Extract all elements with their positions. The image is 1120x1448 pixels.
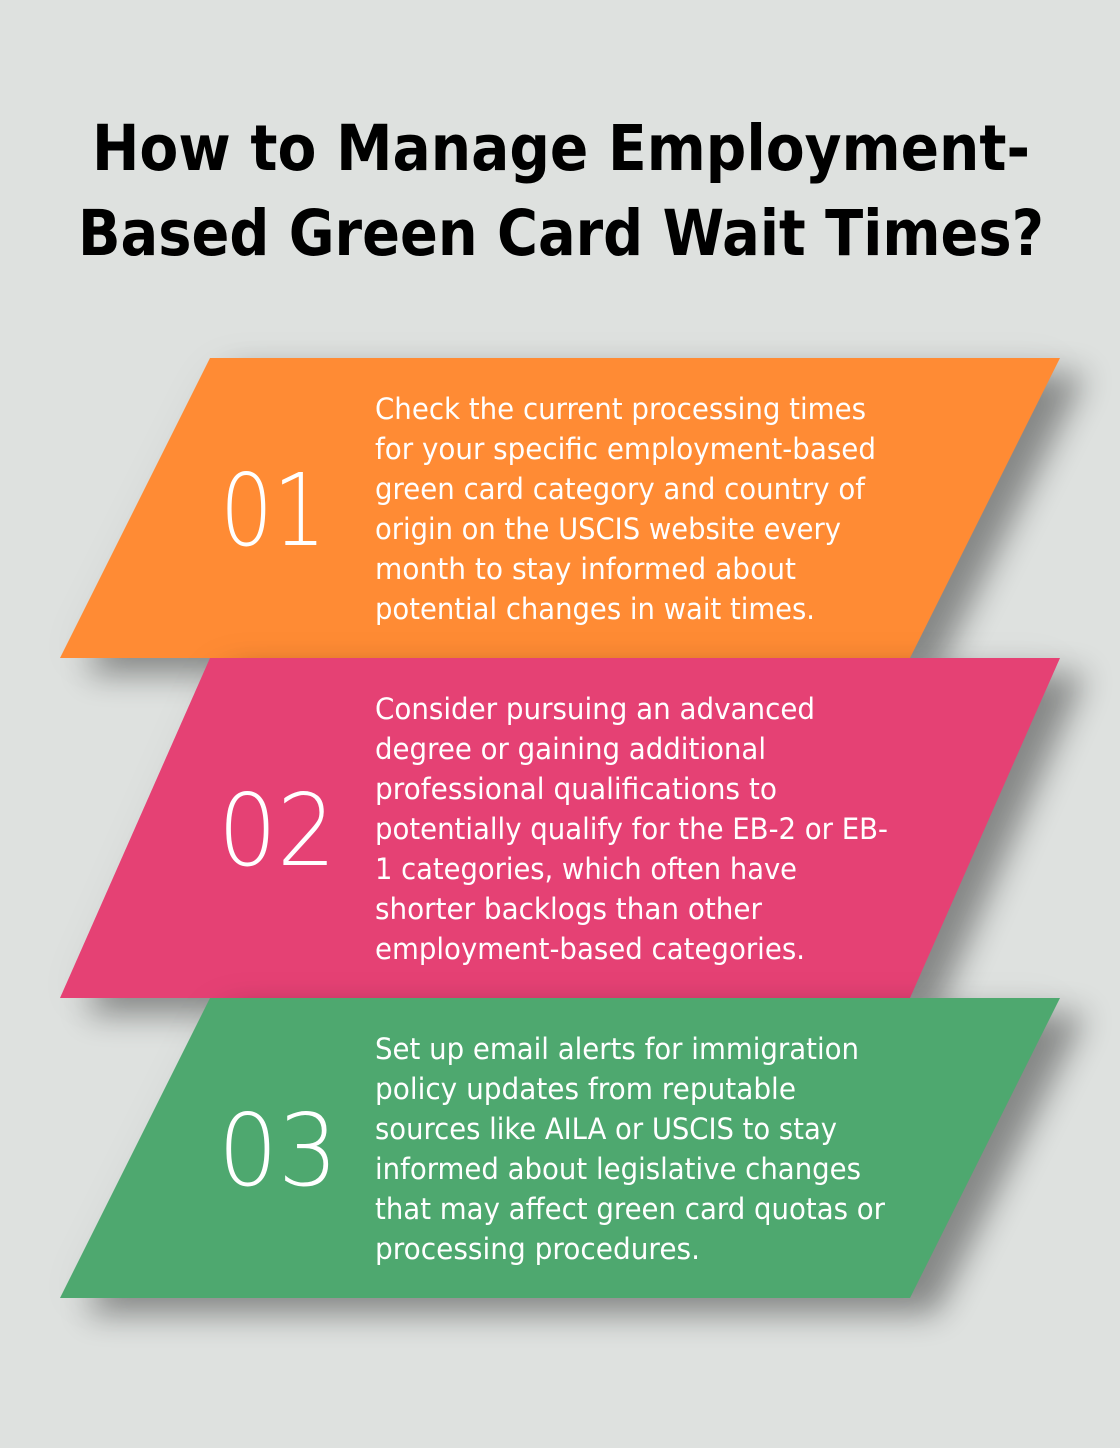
title: How to Manage Employment- [92,112,1030,185]
step 02 text: degree or gaining additional [375,732,766,766]
step 03 text [375,1032,885,1266]
number 03: 03 [218,1092,338,1209]
step 03 text: Set up email alerts for immigration [375,1032,859,1066]
step 01 text: month to stay informed about [375,552,796,586]
green parallelogram [60,998,1060,1298]
step 01 text: origin on the USCIS website every [375,512,841,546]
step 02 text: Consider pursuing an advanced [375,692,815,726]
step 02 text: shorter backlogs than other [375,892,762,926]
step 03 text: processing procedures. [375,1232,700,1266]
title [78,112,1044,270]
step 02 text [375,692,888,966]
number 01: 01 [220,452,326,569]
step 02 text: potentially qualify for the EB-2 or EB- [375,812,888,846]
step 02 text: professional qualifications to [375,772,777,806]
step 03 text: sources like AILA or USCIS to stay [375,1112,837,1146]
panel: step 01 [60,358,1060,658]
orange parallelogram [60,358,1060,658]
step 01 text [375,392,876,626]
step 02 text: 1 categories, which often have [375,852,797,886]
step 03 text: policy updates from reputable [375,1072,796,1106]
step 01 text: green card category and country of [375,472,866,506]
step 03 text: that may affect green card quotas or [375,1192,885,1226]
step 01 text: Check the current processing times [375,392,866,426]
panel: step 02 [60,658,1060,998]
pink parallelogram [60,658,1060,998]
number 02: 02 [218,772,336,889]
step 02 text: employment-based categories. [375,932,805,966]
panel: step 03 [60,998,1060,1298]
step 01 text: potential changes in wait times. [375,592,815,626]
step 03 text: informed about legislative changes [375,1152,861,1186]
step 01 text: for your specific employment-based [375,432,876,466]
